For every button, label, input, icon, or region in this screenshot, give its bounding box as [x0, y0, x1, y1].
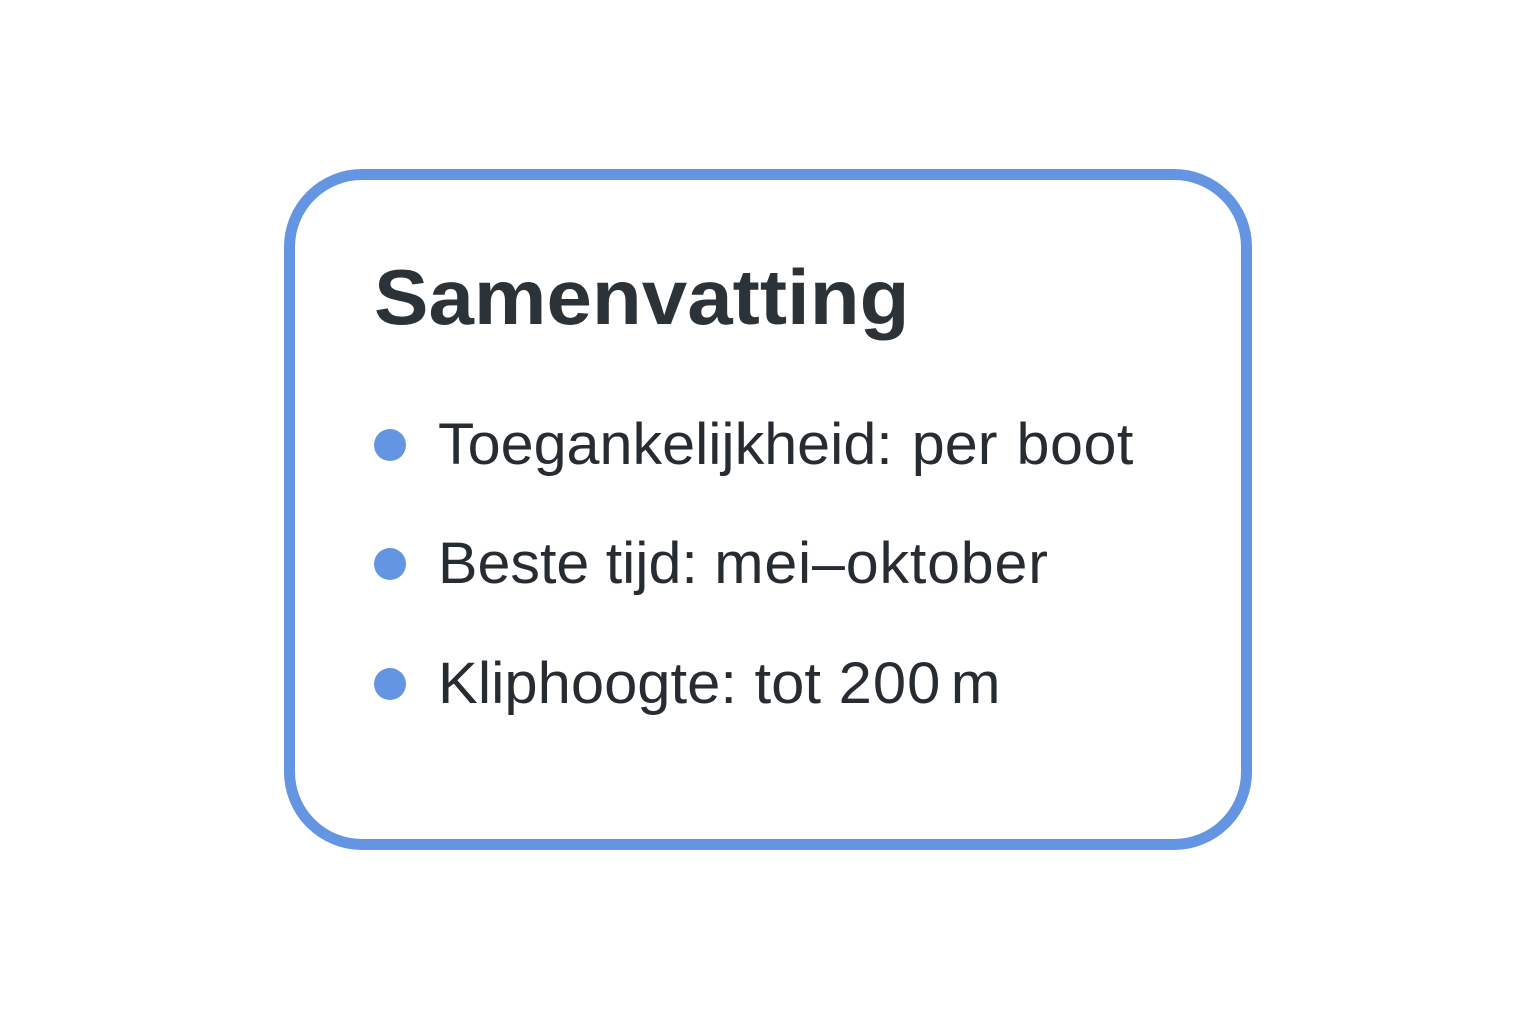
- list item: best time: [374, 531, 1049, 596]
- icon: bullet dot: [374, 668, 406, 700]
- heading: Samenvatting: Samenvatting: [374, 253, 910, 341]
- text: cliff height: Kliphoogte: tot 200 m: [438, 651, 1001, 716]
- text: accessibility: Toegankelijkheid: per boot: [438, 412, 1134, 477]
- panel: summary card: [284, 169, 1252, 850]
- icon: bullet dot: [374, 429, 406, 461]
- list item: accessibility: [374, 412, 1134, 477]
- text: best time: Beste tijd: mei–oktober: [438, 531, 1049, 596]
- list item: cliff height: [374, 651, 1001, 716]
- icon: bullet dot: [374, 548, 406, 580]
